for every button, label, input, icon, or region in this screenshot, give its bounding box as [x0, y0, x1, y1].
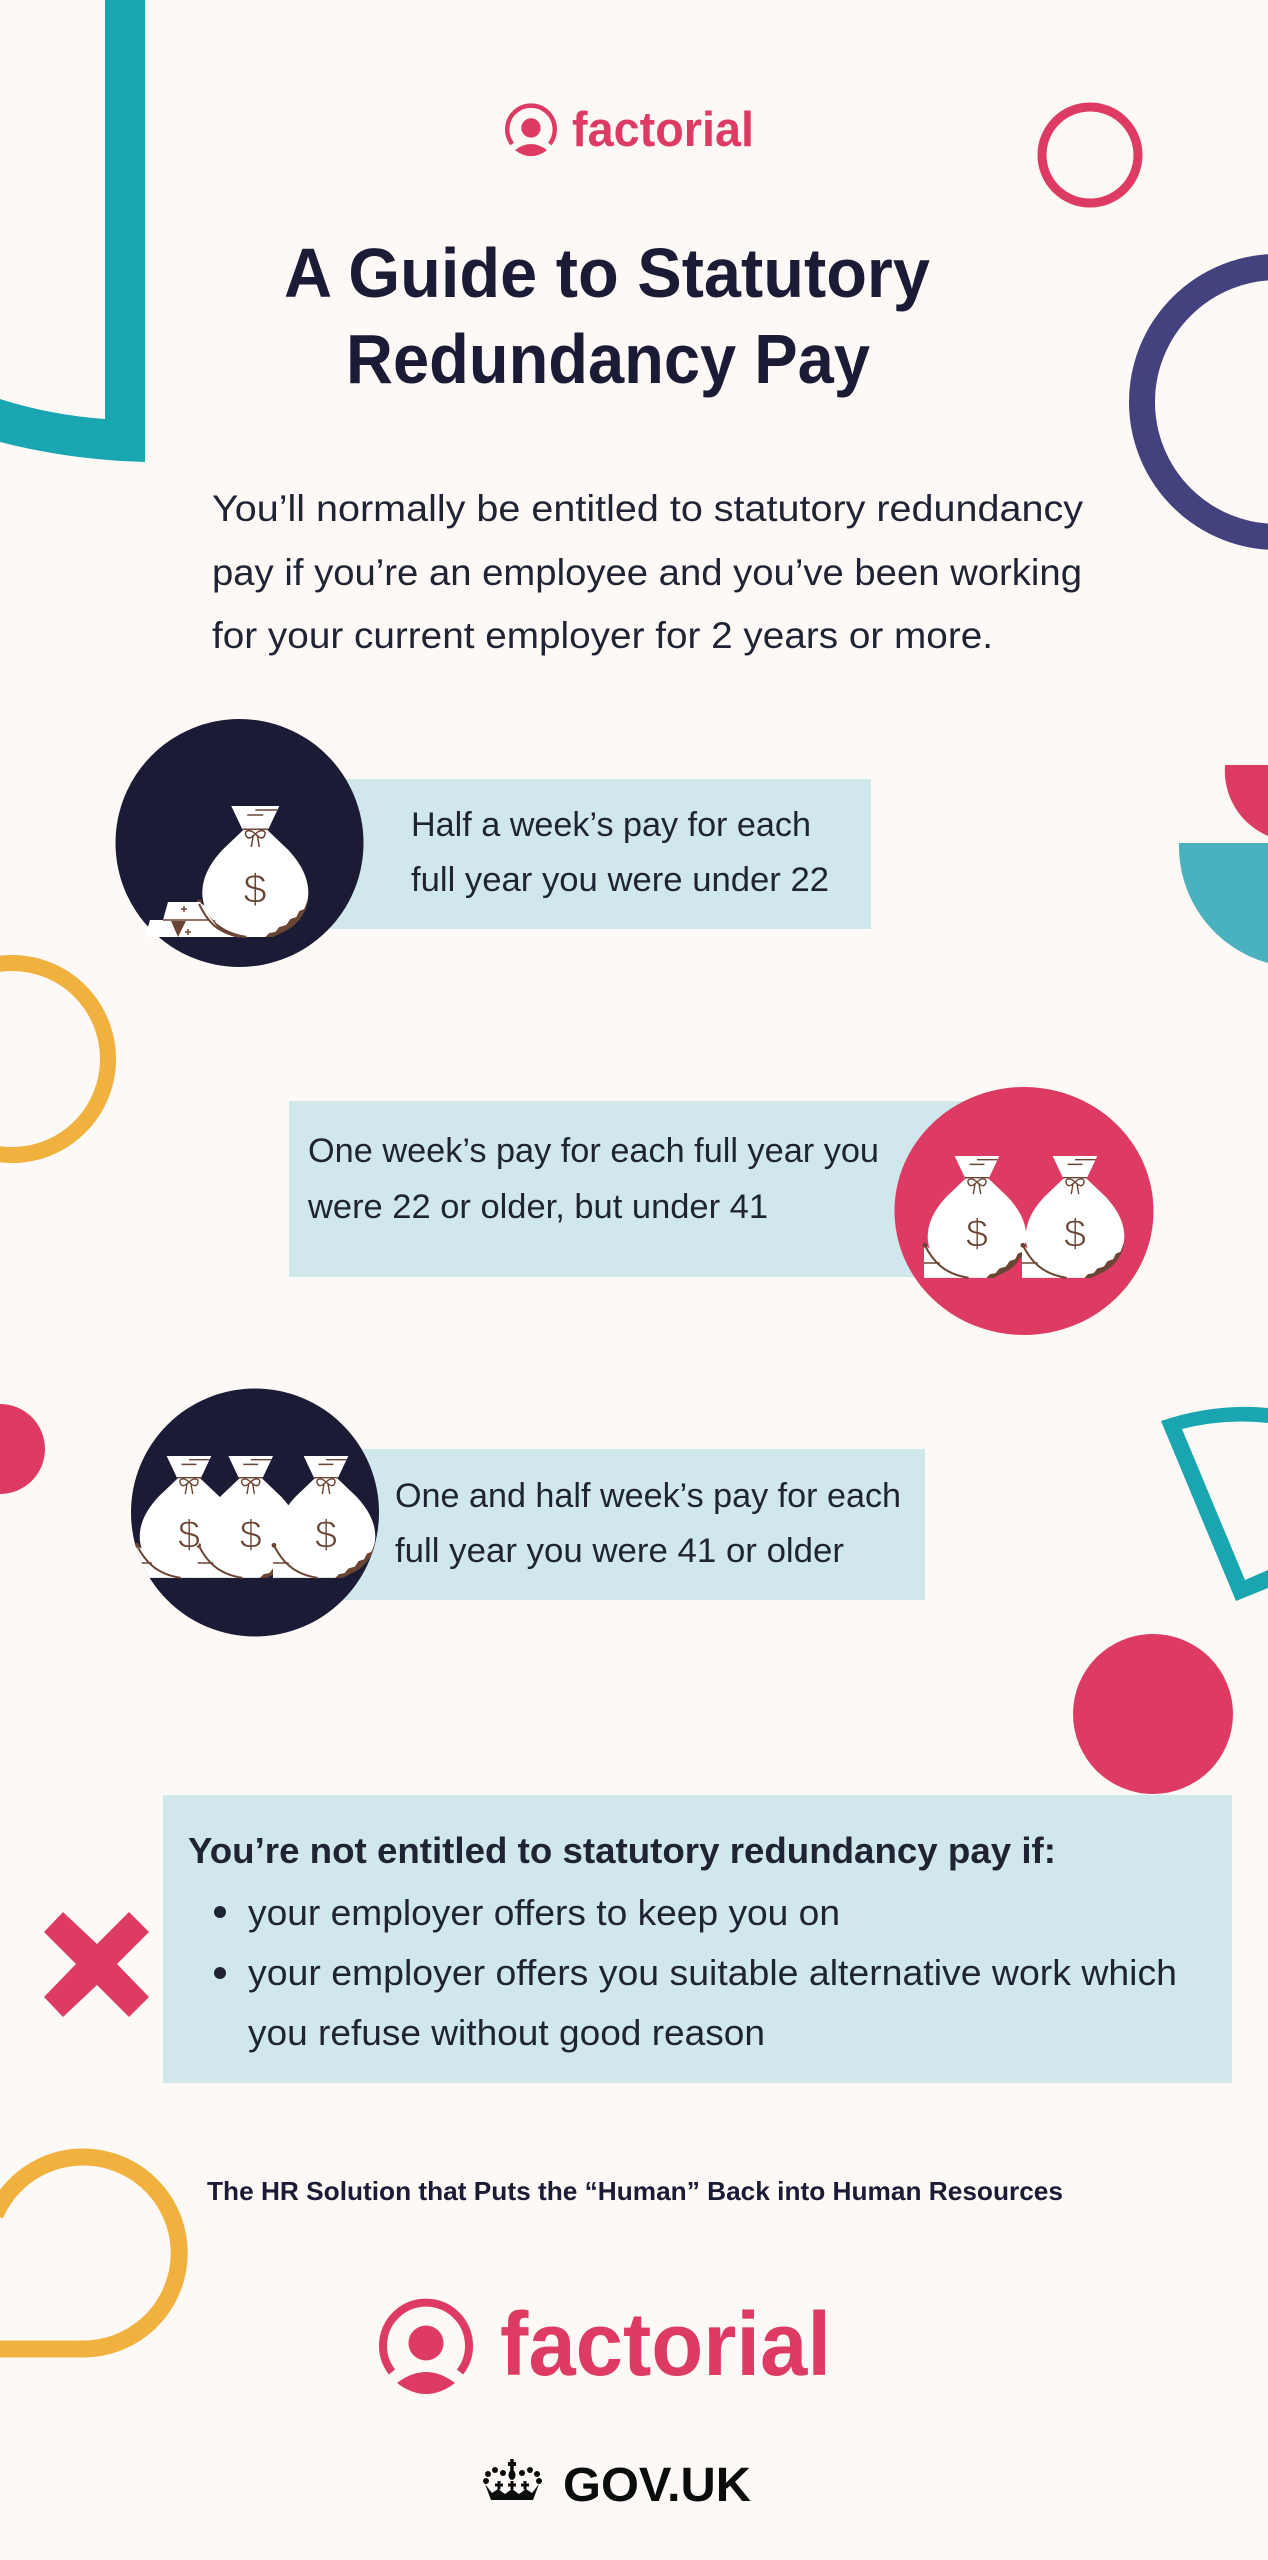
- logo: GOV.UK: [483, 2459, 751, 2512]
- bullet list: your employer offers you suitable alternative work which: [248, 1952, 1177, 1993]
- caption: One week’s pay for each full year you: [308, 1132, 879, 1170]
- logo: GOV.UK: GOV.UK: [563, 2459, 751, 2512]
- caption: One and half week’s pay for each: [395, 1477, 901, 1515]
- caption: Half a week’s pay for each: [411, 806, 811, 844]
- intro text: pay if you’re an employee and you’ve been working: [212, 552, 1082, 593]
- decorative gold drop outline: [0, 2157, 179, 2349]
- intro text: You’ll normally be entitled to statutory redundancy: [212, 488, 1084, 529]
- logo: factorial top: factorial: [572, 103, 754, 157]
- icon: navy circle with money bag: [116, 719, 364, 967]
- bullet list: [214, 1892, 1177, 2053]
- text box: [330, 779, 871, 929]
- caption: full year you were under 22: [411, 861, 829, 899]
- decorative pink half circle right: [1225, 765, 1268, 836]
- bullet list: you refuse without good reason: [248, 2012, 765, 2053]
- caption: [307, 1132, 879, 1226]
- caption: full year you were 41 or older: [395, 1532, 844, 1570]
- intro text: [212, 488, 1084, 656]
- icon: crown: [483, 2459, 542, 2500]
- title: A Guide to Statutory: [284, 234, 930, 312]
- decorative navy ring: [1142, 267, 1268, 537]
- icon: navy circle with three money bags: $: [315, 1513, 337, 1557]
- caption: were 22 or older, but under 41: [307, 1188, 768, 1226]
- panel: 22 to 41: [289, 1087, 1154, 1335]
- icon: navy circle with three money bags: $: [178, 1513, 200, 1557]
- logo: factorial bottom: factorial: [500, 2295, 831, 2395]
- icon: navy circle with three money bags: [131, 1388, 379, 1636]
- intro text: for your current employer for 2 years or more.: [212, 615, 993, 656]
- icon: navy circle with money bag: $: [243, 865, 267, 912]
- decorative gold ring left: [0, 963, 108, 1155]
- text box: [163, 1795, 1232, 2083]
- caption: [395, 1477, 901, 1570]
- text box: [289, 1101, 969, 1277]
- panel: under 22: [116, 719, 871, 967]
- icon: pink circle with two money bags: $: [1064, 1212, 1086, 1256]
- decorative teal frame top left: [0, 0, 145, 462]
- icon: pink circle with two money bags: $: [966, 1212, 988, 1256]
- tagline: The HR Solution that Puts the “Human” Back into Human Resources: [207, 2176, 1063, 2206]
- icon: pink cross: [44, 1912, 149, 2017]
- icon: pink circle with two money bags: [894, 1087, 1154, 1335]
- decorative pink half circle left: [0, 1404, 45, 1494]
- bullet list: your employer offers to keep you on: [248, 1892, 840, 1933]
- icon: navy circle with three money bags: $: [240, 1513, 262, 1557]
- heading: You’re not entitled to statutory redundancy pay if:: [188, 1830, 1056, 1871]
- text box: [340, 1449, 925, 1600]
- title: [284, 234, 930, 398]
- decorative teal half circle right: [1179, 843, 1268, 963]
- title: Redundancy Pay: [346, 320, 870, 398]
- caption: [411, 806, 829, 899]
- decorative pink circle right: [1073, 1634, 1233, 1794]
- panel: 41 or older: [131, 1388, 925, 1636]
- panel: not entitled: [163, 1795, 1232, 2083]
- decorative teal sector right: [1161, 1407, 1268, 1601]
- decorative pink ring: [1042, 107, 1138, 203]
